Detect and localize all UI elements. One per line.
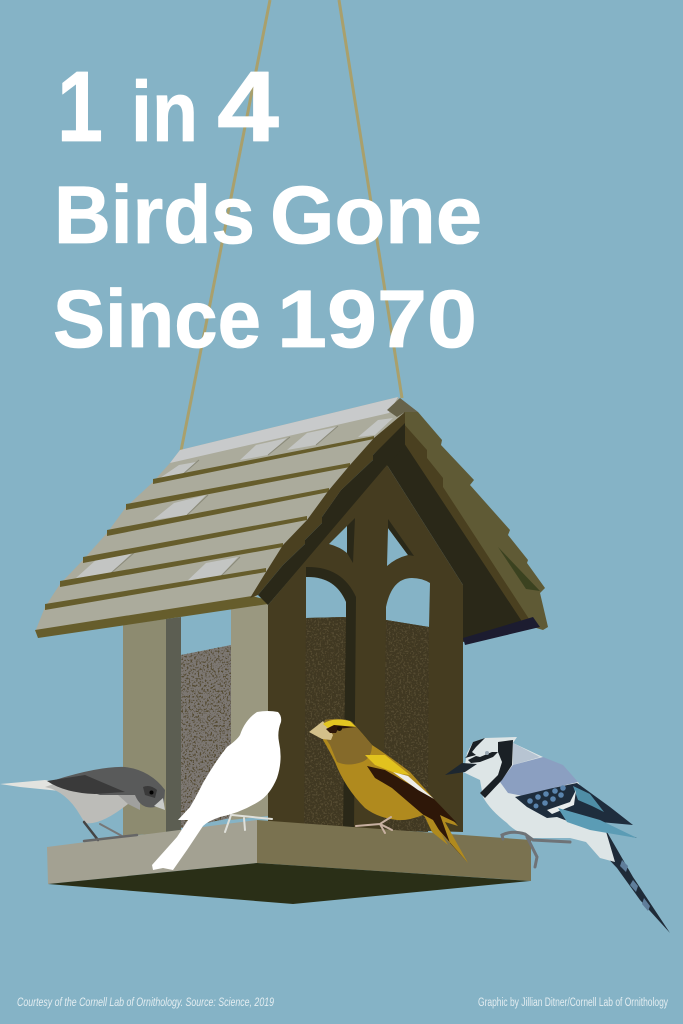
bird: junco bbox=[0, 767, 165, 841]
title: 1 bbox=[57, 51, 103, 163]
platform bbox=[47, 820, 531, 904]
bird: white silhouette bbox=[152, 711, 281, 870]
feeder rear posts and seed bbox=[123, 600, 268, 836]
title: Gone bbox=[270, 170, 482, 261]
gable front bbox=[250, 412, 463, 832]
roof underside bbox=[387, 443, 540, 645]
title bbox=[53, 51, 482, 365]
right roof slope bbox=[403, 412, 548, 630]
title: 4 bbox=[217, 51, 279, 163]
title: in bbox=[131, 65, 198, 160]
footer credits: Courtesy of the Cornell Lab of Ornithology. Source: Science, 2019 bbox=[17, 997, 274, 1009]
bird: blue jay bbox=[445, 737, 670, 933]
footer credits bbox=[17, 997, 668, 1009]
title: 1970 bbox=[277, 274, 477, 365]
title: Birds bbox=[54, 170, 255, 261]
openings bbox=[329, 526, 347, 553]
hanging ropes bbox=[181, 0, 402, 451]
feeder bbox=[35, 397, 548, 904]
title: Since bbox=[53, 274, 261, 365]
seed panels bbox=[304, 617, 346, 826]
bird: evening grosbeak bbox=[309, 719, 468, 863]
shingled roof bbox=[35, 397, 418, 638]
